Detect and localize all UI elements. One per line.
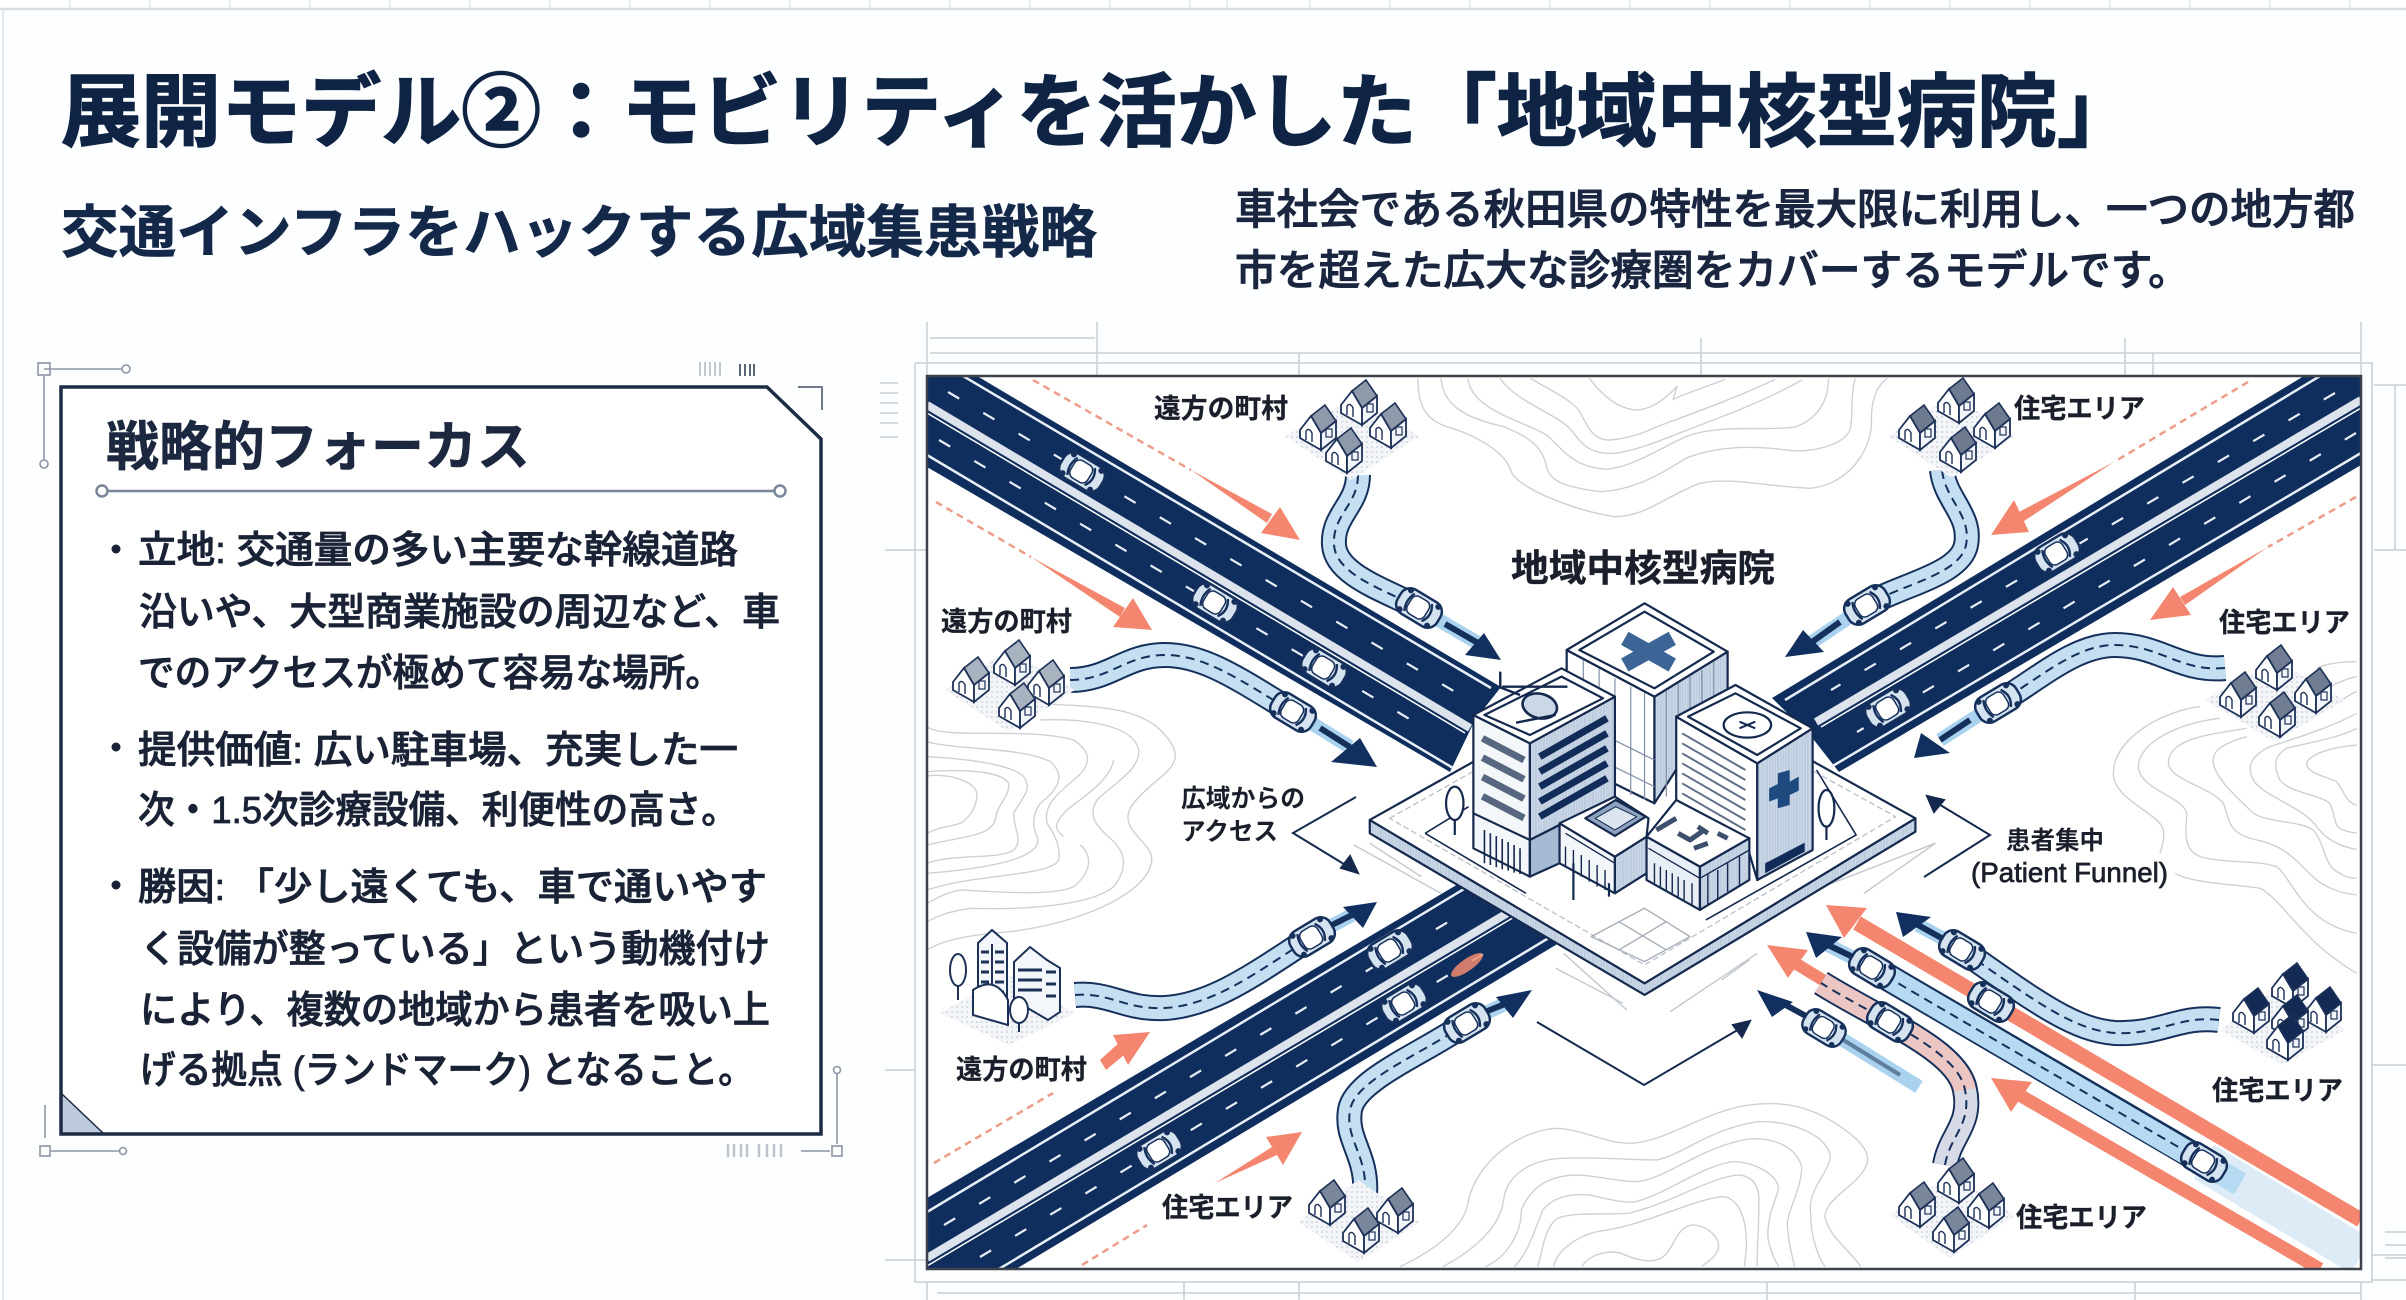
callout: bottom funnel bracket	[1537, 1021, 1750, 1085]
panel: strategic focus	[38, 362, 842, 1157]
podium: right block	[1647, 800, 1749, 910]
coral flow arrows	[934, 380, 2356, 1265]
road: southwest highway	[927, 880, 1559, 1269]
town: southwest high-rises	[940, 930, 1075, 1045]
map label: residential bottom right: 住宅エリア	[2016, 1203, 2147, 1233]
hospital platform	[1354, 667, 1935, 1012]
bullet: win factor: により、複数の地域から患者を吸い上	[140, 990, 770, 1032]
topographic contours	[927, 378, 2357, 1267]
feeder road: bottom houses	[1349, 990, 1532, 1195]
bullet: location	[138, 530, 780, 695]
feeder road: left village	[1070, 655, 1377, 767]
hospital complex	[1354, 603, 1935, 1012]
map label: residential right: 住宅エリア	[2219, 608, 2350, 638]
callout: patient funnel pointer	[1924, 796, 1990, 877]
panel: map illustration	[927, 376, 2361, 1269]
tower: right	[1676, 685, 1813, 880]
description text	[1235, 186, 2355, 294]
feeder road: southwest town	[1075, 902, 1377, 1008]
bullet: win factor: 勝因: 「少し遠くても、車で通いやす	[138, 867, 767, 909]
bullet: location: 立地: 交通量の多い主要な幹線道路	[138, 530, 738, 572]
bullet: location: 沿いや、大型商業施設の周辺など、車	[139, 592, 780, 634]
village: top left	[1285, 380, 1420, 480]
map label: residential top right: 住宅エリア	[2014, 394, 2145, 424]
feeder road: right houses	[1914, 645, 2225, 758]
long blue funnel road	[1806, 932, 2361, 1256]
trees	[1446, 787, 1834, 900]
feeder road: top-left village	[1334, 475, 1501, 660]
feeder roads with cars and arrows	[1070, 470, 2361, 1269]
tower: left with helipad	[1473, 668, 1615, 877]
panel corner accent	[62, 1094, 103, 1133]
bullet: value	[138, 730, 738, 832]
long coral funnel arrows	[1767, 905, 2361, 1269]
feeder road: top-right houses	[1785, 470, 1967, 657]
village: top right	[1888, 378, 2015, 478]
feeder road: pink lane bottom	[1821, 983, 1966, 1165]
bullet: location: でのアクセスが極めて容易な場所。	[138, 653, 722, 695]
map label: residential lower right: 住宅エリア	[2212, 1076, 2343, 1106]
map label: far town left: 遠方の町村	[941, 607, 1072, 637]
map label: hospital: 地域中核型病院	[1511, 548, 1775, 589]
village: bottom right	[1890, 1158, 2015, 1258]
panel heading: 戦略的フォーカス	[106, 418, 530, 477]
title: 展開モデル②：モビリティを活かした「地域中核型病院」	[61, 68, 2137, 157]
bullet: win factor: げる拠点 (ランドマーク) となること。	[140, 1050, 754, 1092]
map label: wide-area access: アクセス	[1181, 818, 1278, 846]
map label: patient funnel: 患者集中	[2006, 827, 2104, 855]
bullet: value: 提供価値: 広い駐車場、充実した一	[138, 730, 738, 772]
map label: far town top: 遠方の町村	[1154, 394, 1288, 424]
village: left	[945, 640, 1075, 732]
description text: 市を超えた広大な診療圏をカバーするモデルです。	[1235, 247, 2190, 294]
tower: center	[1567, 603, 1728, 803]
map label: far town southwest: 遠方の町村	[956, 1055, 1087, 1085]
bullet: value: 次・1.5次診療設備、利便性の高さ。	[138, 790, 738, 832]
village: lower right dark roofs	[2220, 963, 2345, 1065]
description text: 車社会である秋田県の特性を最大限に利用し、一つの地方都	[1235, 186, 2355, 233]
bullet: win factor	[138, 867, 770, 1092]
village: right	[2205, 645, 2345, 742]
bullet: win factor: く設備が整っている」という動機付け	[140, 929, 770, 971]
village: bottom	[1298, 1180, 1420, 1262]
map label: wide-area access	[1181, 785, 1305, 846]
callout: wide-area access pointer	[1293, 797, 1358, 873]
map label: residential bottom: 住宅エリア	[1162, 1193, 1293, 1223]
map frame	[927, 376, 2361, 1269]
bullet list	[112, 530, 780, 1092]
road: northwest highway	[927, 376, 1501, 772]
podium: left block	[1560, 797, 1649, 893]
map label: patient funnel	[1971, 827, 2168, 888]
feeder road: lower right houses	[1896, 912, 2219, 1033]
map label: wide-area access: 広域からの	[1181, 785, 1305, 813]
blue streak car arrow	[1757, 990, 1919, 1087]
map label: patient funnel: (Patient Funnel)	[1971, 857, 2168, 888]
panel divider	[96, 486, 786, 496]
road: northeast highway	[1772, 376, 2361, 772]
subtitle: 交通インフラをハックする広域集患戦略	[61, 201, 1097, 265]
